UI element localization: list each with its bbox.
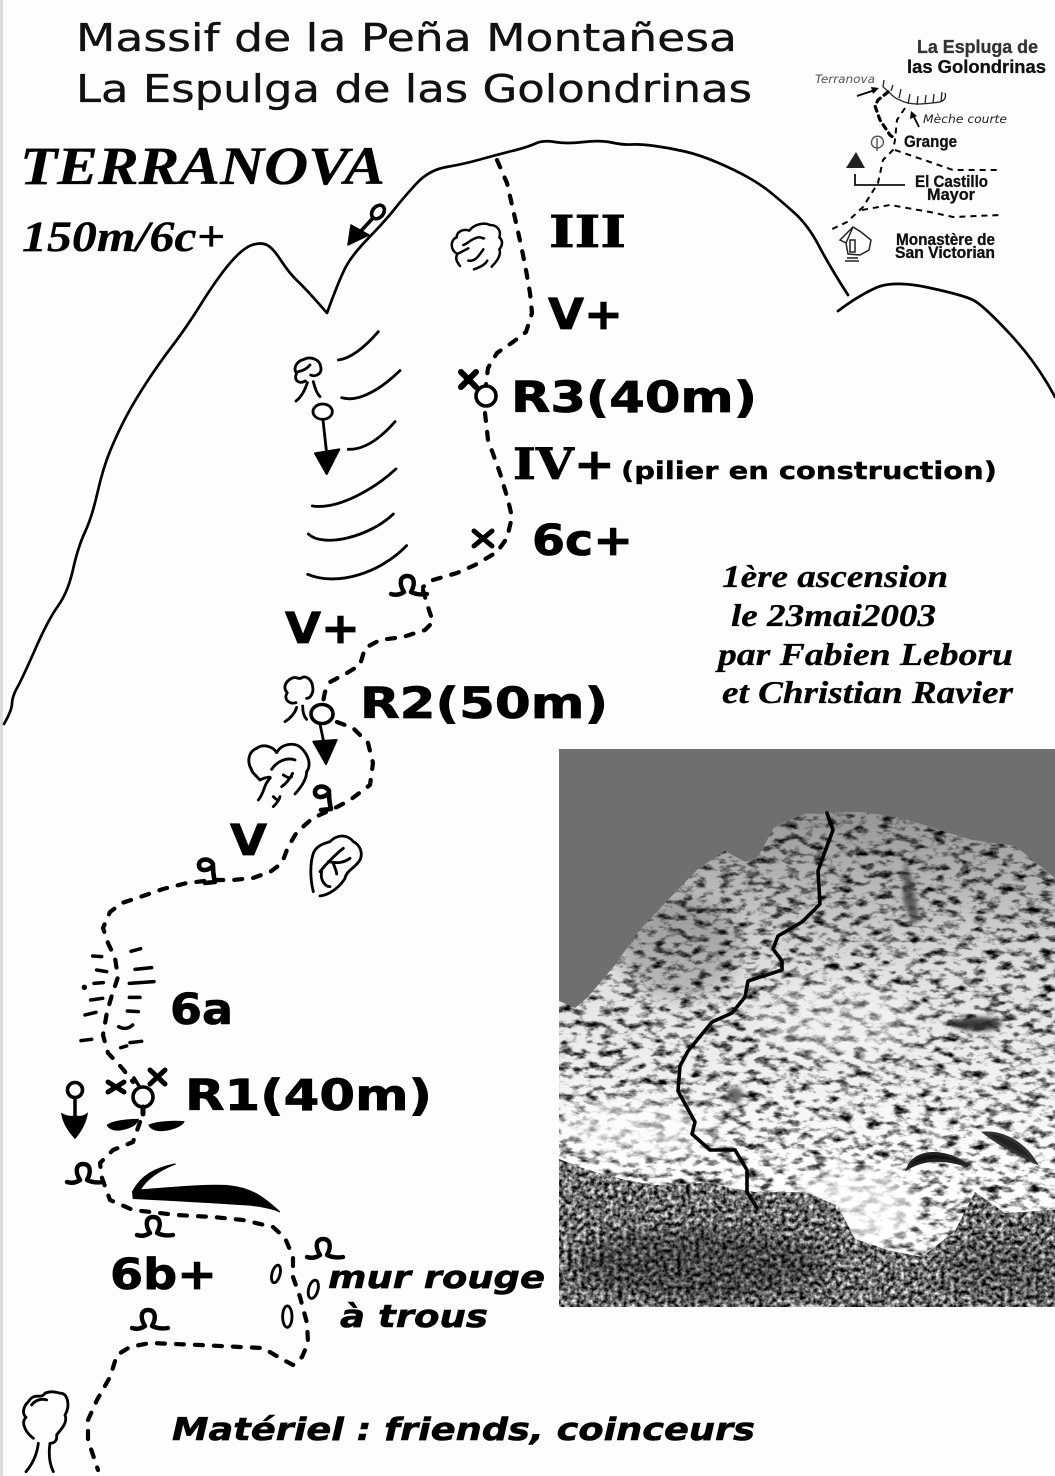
map label: monastery: [895, 231, 995, 262]
trees in foreground: [559, 1159, 1055, 1307]
title: Massif de la Peña Montañesa: [76, 16, 737, 60]
map arrow to Terranova: [857, 87, 879, 96]
bush: summit: [452, 224, 502, 269]
approach map: [815, 37, 1046, 262]
overhang roof: [133, 1164, 279, 1212]
grade 6c+: 6c+: [532, 516, 633, 566]
pitch note: red wall: à trous: [340, 1299, 488, 1335]
grade IV+: IV+: [513, 440, 615, 490]
first ascent credit: le 23mai2003: [731, 597, 936, 633]
map icon: barn tree: [871, 136, 883, 151]
route length and grade: 150m/6c+: [22, 214, 225, 261]
first ascent credit: par Fabien Leboru: [714, 636, 1013, 672]
map label: El Castillo Mayor: Mayor: [927, 185, 975, 204]
belay R1 label: R1(40m): [185, 1071, 432, 1121]
gear note: Matériel : friends, coinceurs: [172, 1412, 755, 1448]
map path: [830, 108, 1000, 230]
bush: below R2: [249, 744, 309, 807]
slab hatching lines: [308, 332, 407, 579]
abseil arrow upper: [313, 404, 339, 474]
ledges under R1: [107, 1119, 184, 1131]
tree: route base: [24, 1392, 68, 1472]
face texture ticks beside 6a: [81, 949, 154, 1048]
map route: Terranova approach: [875, 92, 894, 138]
map label: monastery: San Victorian: [895, 244, 995, 262]
grade 6b+: 6b+: [110, 1250, 217, 1300]
route pitch: R1 to base: [88, 1122, 308, 1470]
first ascent credit: [714, 558, 1014, 710]
tree: near R2: [285, 677, 313, 722]
grade III: III: [549, 207, 626, 258]
hold symbols: [67, 576, 427, 1329]
route pitch: R3 to R2: [323, 413, 512, 702]
route pitch: R2 to R1: [103, 722, 373, 1082]
map title: [907, 37, 1046, 77]
map cliff band: [883, 80, 945, 105]
pitch note: (pilier en construction): [621, 457, 997, 485]
map arrow: short wick: [910, 111, 919, 127]
pockets of red wall: [270, 1264, 320, 1327]
map title: La Espluga de: [917, 37, 1038, 57]
tree: upper ledge: [295, 358, 321, 401]
belay R3 label: R3(40m): [511, 373, 757, 423]
bolt cross: [474, 531, 492, 546]
belay R2: [311, 704, 333, 724]
map label: Grange: Grange: [904, 132, 957, 151]
scan edge: [0, 0, 3, 1476]
route name: TERRANOVA: [20, 136, 385, 196]
top abseil arrow: [348, 203, 387, 245]
map label: Mèche courte: Mèche courte: [923, 112, 1007, 126]
rock texture: [559, 812, 1055, 1257]
map label: El Castillo Mayor: El Castillo: [915, 172, 988, 191]
map label: Terranova: Terranova: [815, 72, 875, 86]
first ascent credit: et Christian Ravier: [722, 674, 1014, 710]
mountain ridge outline: [4, 141, 1055, 724]
title: [76, 16, 752, 111]
route pitch: top to R3: [486, 160, 532, 385]
route traced on photo: [678, 813, 833, 1208]
first ascent credit: 1ère ascension: [722, 558, 948, 594]
grade V+ lower: V+: [285, 604, 360, 654]
map icon: summit triangle: [846, 152, 865, 168]
abseil arrow near R1: [62, 1082, 87, 1138]
pitch note: red wall: [328, 1260, 545, 1335]
map icon: monastery: [840, 227, 871, 261]
map label: monastery: Monastère de: [896, 231, 995, 249]
pitch note: red wall: mur rouge: [328, 1260, 545, 1296]
belay R1 with bolts: [108, 1070, 165, 1114]
belay R2 label: R2(50m): [360, 679, 608, 729]
grade V: V: [230, 816, 268, 866]
map label: El Castillo Mayor: [915, 172, 988, 204]
title: La Espulga de las Golondrinas: [76, 67, 752, 111]
sky: [559, 749, 1055, 1307]
map title: las Golondrinas: [907, 57, 1046, 77]
belay R3 with bolt cross: [461, 372, 496, 406]
bush: beside V: [311, 836, 361, 896]
grade V+: V+: [548, 290, 623, 340]
grade 6a: 6a: [170, 985, 233, 1035]
abseil arrow below R2: [313, 724, 337, 764]
map pointer: [855, 174, 905, 185]
photo of the rock face: [559, 749, 1055, 1307]
